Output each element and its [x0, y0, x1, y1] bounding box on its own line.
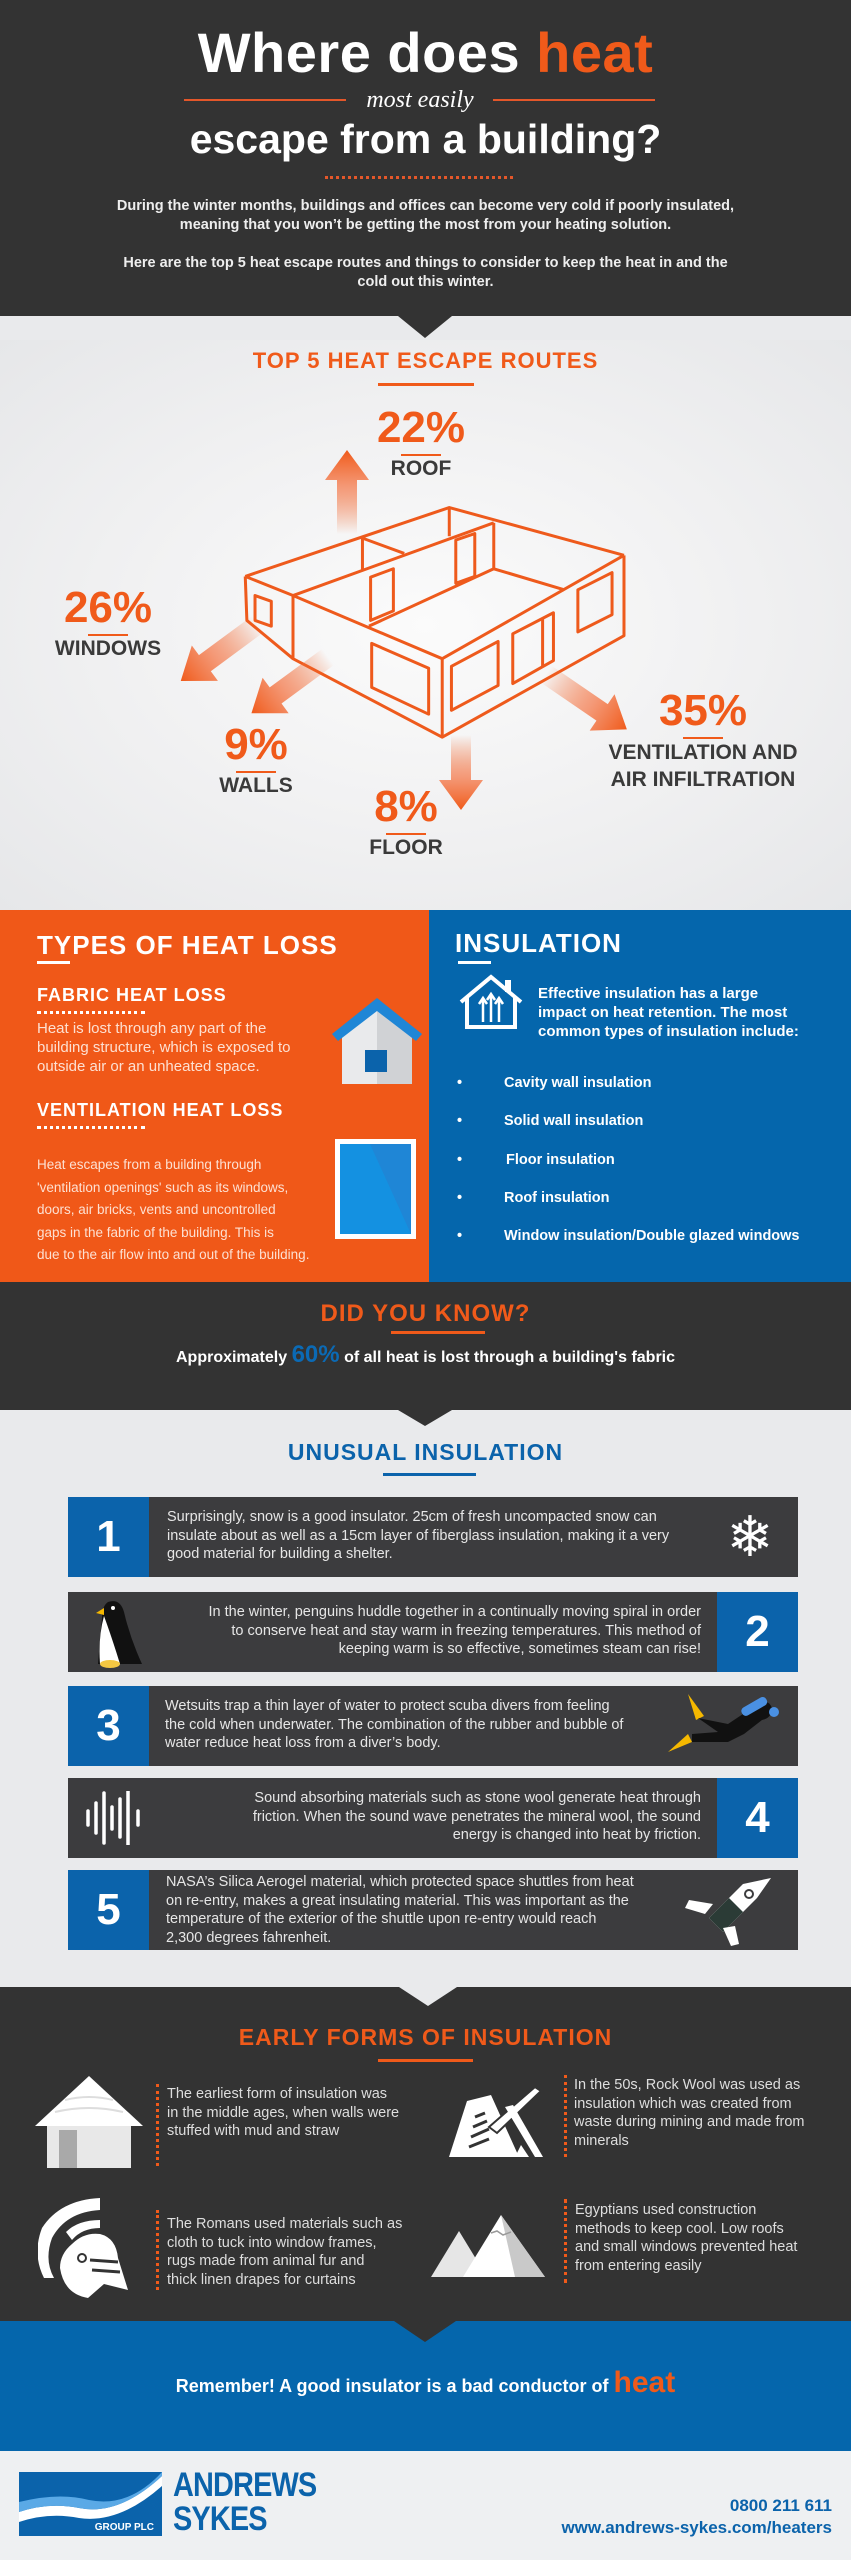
text: rock wool — [574, 2077, 805, 2149]
stat: floor 8% — [369, 782, 443, 859]
card 4: sound: Sound absorbing materials such as stone wool generate heat through — [254, 1790, 701, 1806]
list: insulation types: Roof insulation — [504, 1190, 610, 1206]
icon: window — [335, 1139, 416, 1239]
text: fabric: outside air or an unheated space. — [37, 1058, 260, 1075]
icon: rocket — [685, 1878, 771, 1946]
intro text — [117, 198, 734, 290]
item: rock wool — [449, 2075, 805, 2157]
text: egyptians — [575, 2202, 798, 2274]
heading: early forms: EARLY FORMS OF INSULATION — [239, 2024, 612, 2050]
arrow: roof — [325, 450, 369, 534]
logo: andrews sykes: GROUP PLC — [95, 2522, 154, 2533]
logo: andrews sykes: ANDREWS — [173, 2466, 316, 2504]
text: ventilation — [37, 1157, 309, 1262]
card 4: sound — [68, 1778, 798, 1858]
card 3: wetsuits — [68, 1686, 798, 1766]
text: insulation intro — [538, 985, 799, 1040]
item: hut — [35, 2076, 399, 2168]
triangle pointer — [394, 2321, 456, 2342]
text: ventilation: doors, air bricks, vents and uncontrolled — [37, 1202, 276, 1217]
text: rock wool: minerals — [574, 2133, 629, 2149]
logo: andrews sykes: SYKES — [173, 2500, 267, 2538]
text: romans: rugs made from animal fur and — [167, 2253, 364, 2269]
card 2: penguins: keeping warm is so effective, sometimes steam can rise! — [339, 1641, 701, 1657]
card 2: penguins: 2 — [745, 1607, 770, 1656]
text: rock wool: waste during mining and made from — [574, 2114, 805, 2130]
text: hut — [167, 2086, 399, 2139]
card 5: aerogel: on re-entry, makes a great insulating material. This was important as the — [166, 1893, 629, 1909]
icon: insulated house — [460, 974, 522, 1029]
footer — [0, 2451, 851, 2560]
intro text: Here are the top 5 heat escape routes and things to consider to keep the heat in and the — [123, 255, 728, 271]
item: pyramids — [431, 2199, 798, 2283]
list: insulation types — [457, 1075, 800, 1244]
card 3: wetsuits: water reduce heat loss from a diver’s body. — [165, 1735, 441, 1751]
card 2: penguins — [68, 1592, 798, 1672]
icon: hut — [35, 2076, 143, 2168]
title line 1: Where does heat — [198, 21, 653, 84]
text: insulation intro: Effective insulation has a large — [538, 985, 758, 1002]
text: fabric — [37, 1020, 290, 1075]
triangle pointer from above — [399, 1987, 457, 2006]
contact details — [561, 2496, 832, 2537]
list: insulation types: • — [457, 1190, 462, 1206]
subheading: ventilation heat loss: VENTILATION HEAT LOSS — [37, 1100, 283, 1120]
list: insulation types: • — [457, 1075, 462, 1091]
stat: walls 9% — [219, 720, 293, 797]
list: insulation types: • — [457, 1152, 462, 1168]
list: insulation types: Solid wall insulation — [504, 1113, 643, 1129]
text: romans: The Romans used materials such as — [167, 2216, 402, 2232]
dotted divider — [325, 176, 513, 179]
card 1: snow: good material for building a shelter. — [167, 1546, 393, 1562]
icon: rock and pickaxe — [449, 2088, 543, 2157]
text: hut: in the middle ages, when walls were — [167, 2105, 399, 2121]
stat: windows 26% — [54, 583, 161, 660]
heading: unusual insulation: UNUSUAL INSULATION — [288, 1439, 563, 1465]
text: fabric: Heat is lost through any part of the — [37, 1020, 266, 1037]
arrow: floor — [439, 735, 483, 810]
stat: ventilation 35%: AIR INFILTRATION — [611, 768, 795, 791]
arrow: walls — [238, 639, 341, 731]
text: egyptians: Egyptians used construction — [575, 2202, 756, 2218]
stat: walls 9%: 9% — [224, 720, 288, 769]
card 4: sound: energy is changed into heat by friction. — [453, 1827, 701, 1843]
contact details: 0800 211 611 — [730, 2496, 832, 2515]
panel: did you know — [0, 1282, 851, 1410]
title line 2: escape from a building? — [190, 116, 661, 162]
card 5: aerogel — [68, 1870, 798, 1950]
card 5: aerogel: 5 — [96, 1885, 121, 1934]
intro text: meaning that you won’t be getting the most from your heating solution. — [180, 217, 671, 233]
stat: roof 22%: ROOF — [391, 457, 451, 480]
triangle pointer — [398, 316, 452, 338]
list: insulation types: Window insulation/Double glazed windows — [504, 1228, 800, 1244]
card 2: penguins: to conserve heat and stay warm in freezing temperatures. This method of — [231, 1623, 701, 1639]
subtitle script: most easily — [366, 87, 474, 113]
triangle pointer — [398, 1410, 452, 1426]
card 4: sound: 4 — [745, 1793, 770, 1842]
stat: windows 26%: 26% — [64, 583, 152, 632]
panel: top 5 heat escape routes — [0, 340, 851, 910]
intro text: cold out this winter. — [357, 274, 494, 290]
text: hut: The earliest form of insulation was — [167, 2086, 387, 2102]
contact details: www.andrews-sykes.com/heaters — [561, 2518, 832, 2537]
card 3: wetsuits: Wetsuits trap a thin layer of water to protect scuba divers from feeling — [165, 1698, 610, 1714]
card 1: snow — [68, 1497, 798, 1577]
stat: walls 9%: WALLS — [219, 774, 293, 797]
panel: remember — [0, 2321, 851, 2451]
icon: diver — [668, 1694, 779, 1752]
building wireframe — [245, 508, 624, 737]
panel: early forms of insulation — [0, 1987, 851, 2321]
arrow: ventilation — [534, 656, 639, 748]
panel: types of heat loss — [0, 910, 429, 1282]
text: romans: cloth to tuck into window frames, — [167, 2235, 377, 2251]
heading: did you know: DID YOU KNOW? — [321, 1300, 530, 1327]
text: romans — [167, 2216, 402, 2288]
card 3: wetsuits: the cold when underwater. The combination of the rubber and bubble of — [165, 1717, 623, 1733]
text: ventilation: gaps in the fabric of the building. This is — [37, 1225, 274, 1240]
card 1: snow: insulate about as well as a 15cm layer of fiberglass insulation, making it a very — [167, 1528, 669, 1544]
text: ventilation: due to the air flow into and out of the building. — [37, 1247, 309, 1262]
header section — [0, 0, 851, 316]
card 2: penguins: In the winter, penguins huddle together in a continually moving spiral in order — [208, 1604, 701, 1620]
stat: ventilation 35%: 35% — [659, 686, 747, 735]
heading: top 5: TOP 5 HEAT ESCAPE ROUTES — [253, 348, 598, 373]
card 5: aerogel: temperature of the exterior of the shuttle upon re-entry would reach — [166, 1911, 596, 1927]
panel: unusual insulation — [288, 1439, 563, 1476]
list: insulation types: Cavity wall insulation — [504, 1075, 651, 1091]
list: insulation types: • — [457, 1228, 462, 1244]
card 5: aerogel: 2,300 degrees fahrenheit. — [166, 1930, 331, 1946]
list: insulation types: Floor insulation — [506, 1152, 615, 1168]
stat: roof 22% — [377, 403, 465, 480]
icon: helmet — [38, 2198, 128, 2298]
intro text: During the winter months, buildings and offices can become very cold if poorly insulated, — [117, 198, 734, 214]
text: hut: stuffed with mud and straw — [167, 2123, 339, 2139]
card 1: snow: 1 — [96, 1512, 121, 1561]
text: egyptians: and small windows prevented heat — [575, 2239, 797, 2255]
fact text: Approximately 60% of all heat is lost through a building's fabric — [176, 1341, 675, 1368]
stat: windows 26%: WINDOWS — [55, 637, 161, 660]
icon: penguin — [96, 1601, 142, 1668]
item: roman helmet — [38, 2198, 402, 2298]
card 5: aerogel: NASA’s Silica Aerogel material, which protected space shuttles from heat — [166, 1874, 634, 1890]
chart: building diagram with arrows — [180, 450, 627, 810]
icon: snowflake: ❄ — [727, 1505, 773, 1568]
text: rock wool: insulation which was created from — [574, 2096, 792, 2112]
heading: insulation: INSULATION — [455, 928, 622, 958]
text: romans: thick linen drapes for curtains — [167, 2272, 356, 2288]
text: ventilation: 'ventilation openings' such as its windows, — [37, 1180, 288, 1195]
text: insulation intro: impact on heat retention. The most — [538, 1004, 787, 1021]
stat: ventilation 35%: VENTILATION AND — [608, 741, 798, 764]
stat: ventilation 35% — [608, 686, 798, 791]
icon: house — [332, 998, 422, 1084]
text: fabric: building structure, which is exposed to — [37, 1039, 290, 1056]
subheading: fabric heat loss: FABRIC HEAT LOSS — [37, 985, 227, 1005]
stat: floor 8%: FLOOR — [369, 836, 443, 859]
heading: types of heat loss: TYPES OF HEAT LOSS — [37, 930, 338, 960]
card 4: sound: friction. When the sound wave penetrates the mineral wool, the sound — [253, 1809, 701, 1825]
arrow: windows — [168, 606, 271, 699]
stat: floor 8%: 8% — [374, 782, 438, 831]
text: insulation intro: common types of insulation include: — [538, 1023, 799, 1040]
icon: pyramids — [431, 2215, 545, 2277]
card 1: snow: Surprisingly, snow is a good insulator. 25cm of fresh uncompacted snow can — [167, 1509, 657, 1525]
list: insulation types: • — [457, 1113, 462, 1129]
remember text: Remember! A good insulator is a bad conductor of heat — [176, 2366, 675, 2399]
icon: sound wave — [86, 1791, 140, 1845]
panel: insulation — [429, 910, 851, 1282]
stat: roof 22%: 22% — [377, 403, 465, 452]
text: egyptians: from entering easily — [575, 2258, 702, 2274]
logo: andrews sykes — [19, 2466, 316, 2538]
text: egyptians: methods to keep cool. Low roofs — [575, 2221, 784, 2237]
text: rock wool: In the 50s, Rock Wool was used as — [574, 2077, 800, 2093]
text: ventilation: Heat escapes from a building through — [37, 1157, 261, 1172]
card 3: wetsuits: 3 — [96, 1701, 121, 1750]
